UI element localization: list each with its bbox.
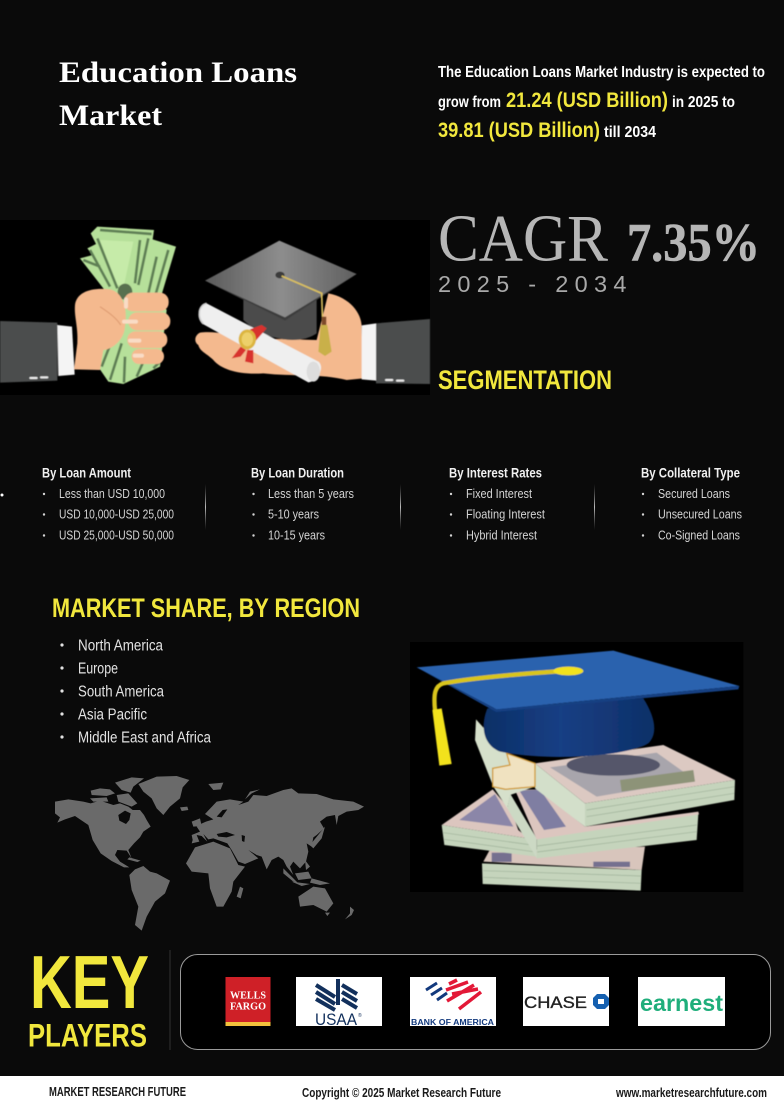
market growth summary: in 2025 to: [672, 94, 735, 111]
icon: open hand: [195, 293, 363, 380]
illustration: hands exchanging money and graduation cap: [0, 220, 430, 395]
segment: by interest rates: Floating Interest: [466, 506, 545, 522]
segment: by collateral type: Secured Loans: [658, 486, 730, 501]
tasmania and new zealand: [325, 907, 354, 919]
tassel: [432, 667, 583, 766]
black, baltic and caspian seas: [217, 809, 245, 842]
icon: banknotes: [80, 227, 176, 384]
segment: by loan amount: USD 25,000-USD 50,000: [59, 528, 174, 542]
region list: Middle East and Africa: [78, 730, 211, 746]
segment: by collateral type: [641, 464, 742, 542]
australia: [298, 887, 333, 912]
logo: usaa: ®: [358, 1012, 362, 1019]
CAGR figure: 2025 - 2034: [438, 271, 633, 297]
logo: chase: [523, 977, 609, 1026]
arctic islands: [90, 777, 144, 807]
segment: by loan duration: Less than 5 years: [268, 486, 354, 501]
segment: by loan duration: 10-15 years: [268, 528, 325, 542]
southeast asia islands: [283, 827, 330, 886]
heading: segmentation: SEGMENTATION: [438, 365, 612, 395]
segment: by loan amount: Less than USD 10,000: [59, 486, 165, 501]
logo: usaa: [296, 977, 382, 1029]
market growth summary: 39.81 (USD Billion): [438, 119, 600, 142]
middle stack left: [442, 789, 537, 857]
middle stack right: [507, 789, 699, 858]
segment: by loan duration: 5-10 years: [268, 506, 319, 522]
segment: by interest rates: Fixed Interest: [466, 486, 532, 501]
segment: by interest rates: [449, 464, 545, 542]
segment: by loan amount: By Loan Amount: [42, 464, 131, 480]
stray bullet: [0, 494, 4, 496]
greenland: [138, 776, 189, 815]
footer: [0, 1076, 784, 1108]
british isles: [192, 818, 202, 827]
key players panel: [180, 954, 770, 1050]
icon: diploma scroll with seal: [199, 303, 321, 382]
icon: fist: [74, 289, 170, 370]
logo: wells fargo: WELLS: [230, 990, 266, 1002]
madagascar: [237, 887, 243, 898]
region list: South America: [78, 684, 164, 700]
key players heading: [28, 940, 149, 1054]
iceland and svalbard: [180, 783, 260, 811]
key players heading: KEY: [30, 940, 149, 1024]
segment: by collateral type: Co-Signed Loans: [658, 528, 740, 542]
logo: usaa: USAA: [315, 1010, 358, 1029]
heading: market share by region: MARKET SHARE, BY REGION: [52, 593, 360, 623]
market growth summary: 21.24 (USD Billion): [506, 89, 668, 112]
title: Market: [59, 99, 162, 132]
icon: sleeve and cuff right: [362, 319, 430, 384]
segment: by interest rates: By Interest Rates: [449, 464, 542, 480]
cap: [417, 651, 739, 766]
segment: by loan duration: By Loan Duration: [251, 464, 344, 480]
key players heading: PLAYERS: [28, 1018, 147, 1054]
segment: by interest rates: Hybrid Interest: [466, 528, 537, 542]
top stack: [475, 719, 735, 827]
africa: [186, 842, 245, 907]
segment: by collateral type: Unsecured Loans: [658, 506, 742, 522]
title: [59, 56, 297, 132]
logo: bank of america: BANK OF AMERICA: [411, 1018, 494, 1027]
region list: Asia Pacific: [78, 706, 147, 724]
market growth summary: [438, 64, 765, 142]
CAGR figure: CAGR: [438, 202, 608, 276]
segment: by loan amount: USD 10,000-USD 25,000: [59, 506, 174, 522]
footer text: MARKET RESEARCH FUTURE: [49, 1084, 186, 1099]
logo: earnest: earnest: [640, 990, 723, 1016]
segment: by loan amount: [42, 464, 174, 542]
logo: bank of america: [410, 977, 496, 1027]
north america: [55, 799, 151, 867]
icon: graduation cap: [205, 241, 357, 356]
footer text: Copyright © 2025 Market Research Future: [302, 1085, 501, 1100]
logo: wells fargo: [226, 977, 270, 1026]
region list: North America: [78, 638, 163, 654]
segment: by loan duration: [251, 464, 354, 542]
title: Education Loans: [59, 56, 297, 89]
world map: [55, 776, 364, 931]
south america: [129, 866, 170, 931]
region list: [60, 638, 211, 746]
icon: sleeve and cuff left: [0, 321, 75, 383]
hudson bay: [118, 811, 131, 824]
caribbean: [127, 857, 141, 862]
CAGR figure: [438, 202, 760, 297]
logo: chase: CHASE: [524, 993, 587, 1012]
footer text: [49, 1084, 767, 1100]
market growth summary: grow from: [438, 94, 501, 111]
segment: by collateral type: By Collateral Type: [641, 464, 740, 480]
logo: earnest: [638, 977, 725, 1026]
region list: Europe: [78, 660, 118, 678]
market growth summary: till 2034: [604, 124, 656, 141]
illustration: graduation cap on banknote stacks: [410, 642, 743, 892]
eurasia: [192, 788, 364, 875]
bottom stack: [482, 847, 645, 891]
logo: wells fargo: FARGO: [230, 1002, 266, 1012]
CAGR figure: 7.35%: [627, 212, 760, 272]
